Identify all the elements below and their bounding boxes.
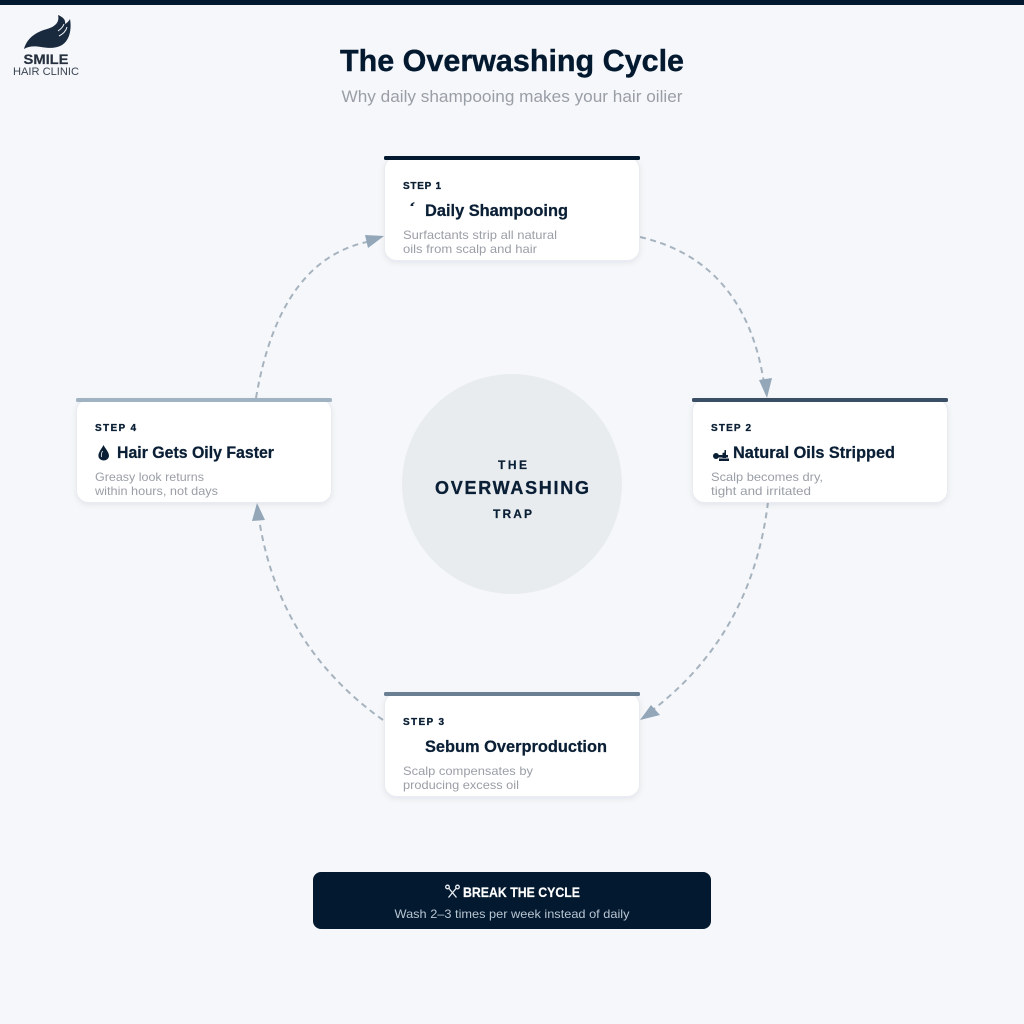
panel: step 3: producing excess oil xyxy=(403,778,519,792)
step 2 heading: Natural Oils Stripped xyxy=(733,444,895,462)
arrow: step 4 to step 1 xyxy=(256,235,384,398)
center text: trap: TRAP xyxy=(493,507,532,521)
panel: step 3 xyxy=(384,692,640,796)
step 1 label: STEP 1 xyxy=(403,181,441,192)
icon: hair swoosh xyxy=(24,15,71,49)
panel: step 1 xyxy=(384,156,640,260)
center text: overwashing: OVERWASHING xyxy=(435,478,589,498)
step 4 heading: Hair Gets Oily Faster xyxy=(117,444,275,462)
center circle: the overwashing trap xyxy=(402,374,622,594)
panel: step 4: within hours, not days xyxy=(94,484,218,498)
icon: scissors xyxy=(446,885,459,898)
logo subtitle: HAIR CLINIC xyxy=(13,66,79,78)
step 1 description: Surfactants strip all natural xyxy=(403,228,557,242)
icon: oil tap xyxy=(713,450,729,461)
subtitle: Why daily shampooing makes your hair oilier xyxy=(342,88,683,106)
logo: Smile Hair Clinic xyxy=(13,15,79,78)
arrow: step 3 to step 4 xyxy=(252,503,383,720)
panel: step 2 xyxy=(692,398,948,502)
callout heading: BREAK THE CYCLE xyxy=(463,885,580,900)
panel: step 4 xyxy=(76,398,332,502)
arrow: step 2 to step 3 xyxy=(640,502,768,720)
step 3 heading: Sebum Overproduction xyxy=(425,738,607,756)
step 1 heading: Daily Shampooing xyxy=(425,202,568,220)
step 4 label: STEP 4 xyxy=(95,423,136,434)
step 2 description: Scalp becomes dry, xyxy=(711,470,823,484)
panel: step 1: oils from scalp and hair xyxy=(403,242,537,256)
icon: droplet fragment xyxy=(410,202,414,206)
step 4 description: Greasy look returns xyxy=(95,470,204,484)
title: The Overwashing Cycle xyxy=(340,43,684,78)
icon: oil drop xyxy=(98,445,109,460)
step 2 label: STEP 2 xyxy=(711,423,751,434)
callout text: Wash 2–3 times per week instead of daily xyxy=(394,907,630,921)
panel: step 2: tight and irritated xyxy=(711,484,811,498)
step 3 label: STEP 3 xyxy=(403,717,444,728)
logo wordmark: SMILE xyxy=(24,51,68,67)
arrow: step 1 to step 2 xyxy=(640,237,772,398)
callout: break the cycle xyxy=(313,872,711,929)
center text: the: THE xyxy=(498,458,527,472)
step 3 description: Scalp compensates by xyxy=(403,764,533,778)
